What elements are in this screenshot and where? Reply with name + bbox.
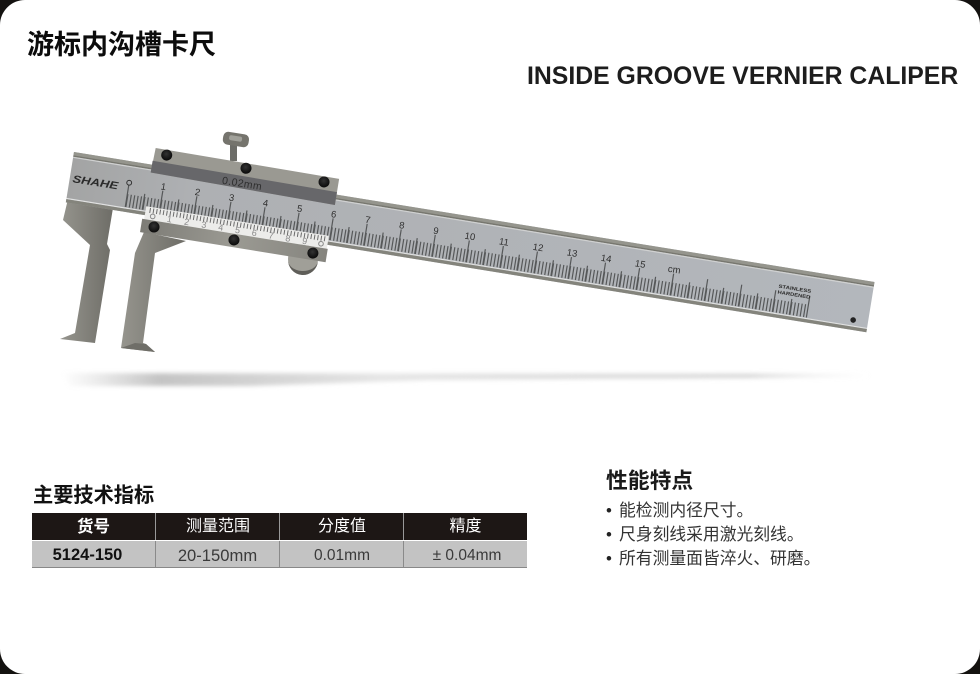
main scale numbers: 7 — [364, 215, 371, 226]
vernier white scale: 6 — [251, 228, 258, 238]
thumb wheel — [288, 244, 318, 275]
header: graduation — [280, 513, 404, 540]
main scale numbers: 15 — [634, 258, 646, 271]
feature 2: 尺身刻线采用激光刻线。 — [619, 525, 804, 544]
main scale numbers: 10 — [464, 231, 476, 243]
heading: main specifications: 主要技术指标 — [33, 485, 154, 507]
main scale numbers: 6 — [330, 209, 337, 221]
main scale numbers: 9 — [432, 226, 439, 237]
main scale numbers: 8 — [398, 220, 405, 232]
vernier white scale: 1 — [166, 214, 173, 225]
stainless hardened mark — [777, 284, 813, 301]
main scale numbers: cm — [667, 264, 681, 277]
vernier white scale: 4 — [218, 222, 224, 233]
vernier white scale: 5 — [234, 225, 241, 236]
main scale numbers: 4 — [262, 198, 269, 210]
main scale numbers: 14 — [600, 253, 612, 265]
vernier white scale: 2 — [183, 217, 190, 227]
main scale numbers: 5 — [296, 204, 303, 215]
feature 3: 所有测量面皆淬火、研磨。 — [619, 549, 820, 568]
vernier reading label: 0.02mm — [221, 175, 263, 193]
heading: features: 性能特点 — [606, 468, 693, 493]
ruler beam — [66, 152, 875, 332]
vernier white scale: 7 — [268, 230, 274, 241]
end hole — [850, 317, 856, 323]
feature 1: 能检测内径尺寸。 — [619, 501, 753, 520]
main scale numbers: 11 — [498, 236, 510, 249]
cell: item no: 5124-150 — [53, 546, 122, 564]
cell: graduation: 0.01mm — [314, 547, 370, 564]
header: accuracy — [404, 513, 527, 540]
cell: graduation — [280, 541, 404, 568]
vernier white scale: 9 — [301, 236, 308, 246]
vernier white scale: 8 — [285, 233, 291, 244]
main scale ticks — [125, 185, 810, 317]
stainless hardened mark: HARDENED — [777, 290, 811, 301]
header: range: 测量范围 — [186, 518, 250, 535]
ground shadow — [62, 373, 870, 386]
cell: item no — [32, 541, 156, 568]
header: graduation: 分度值 — [318, 518, 366, 535]
right movable jaw — [121, 232, 186, 352]
cell: range: 20-150mm — [178, 546, 257, 565]
cell: range — [156, 541, 280, 568]
cell: accuracy — [404, 541, 527, 568]
main scale numbers: 2 — [194, 187, 201, 199]
main scale numbers: 12 — [532, 242, 544, 254]
left fixed jaw — [60, 199, 113, 343]
feature 2: • — [606, 525, 612, 544]
header: range — [156, 513, 280, 540]
feature 3: • — [606, 549, 612, 568]
main scale numbers — [126, 176, 681, 277]
cell: accuracy: ± 0.04mm — [433, 547, 501, 564]
feature list — [606, 501, 820, 568]
vernier white scale — [144, 206, 329, 250]
lower slider bar — [140, 219, 328, 262]
title: 游标内沟槽卡尺 — [27, 30, 216, 60]
stainless hardened mark: STAINLESS — [778, 284, 813, 295]
feature 1: • — [606, 501, 612, 520]
header: item no — [32, 513, 156, 540]
main scale numbers: 1 — [160, 181, 167, 193]
upper slider screws — [160, 149, 331, 188]
lower slider screws — [148, 221, 319, 259]
spec table — [32, 513, 527, 568]
main scale numbers: 3 — [228, 192, 235, 204]
english title: INSIDE GROOVE VERNIER CALIPER — [527, 63, 958, 90]
brand label: SHAHE — [72, 173, 120, 193]
header: item no: 货号 — [77, 518, 110, 536]
locking knob — [222, 131, 250, 161]
header: accuracy: 精度 — [449, 518, 482, 535]
rotated ruler assembly — [63, 135, 877, 350]
main scale numbers: 13 — [566, 247, 578, 260]
vernier white scale: 3 — [201, 219, 207, 230]
upper slider block — [150, 148, 339, 205]
